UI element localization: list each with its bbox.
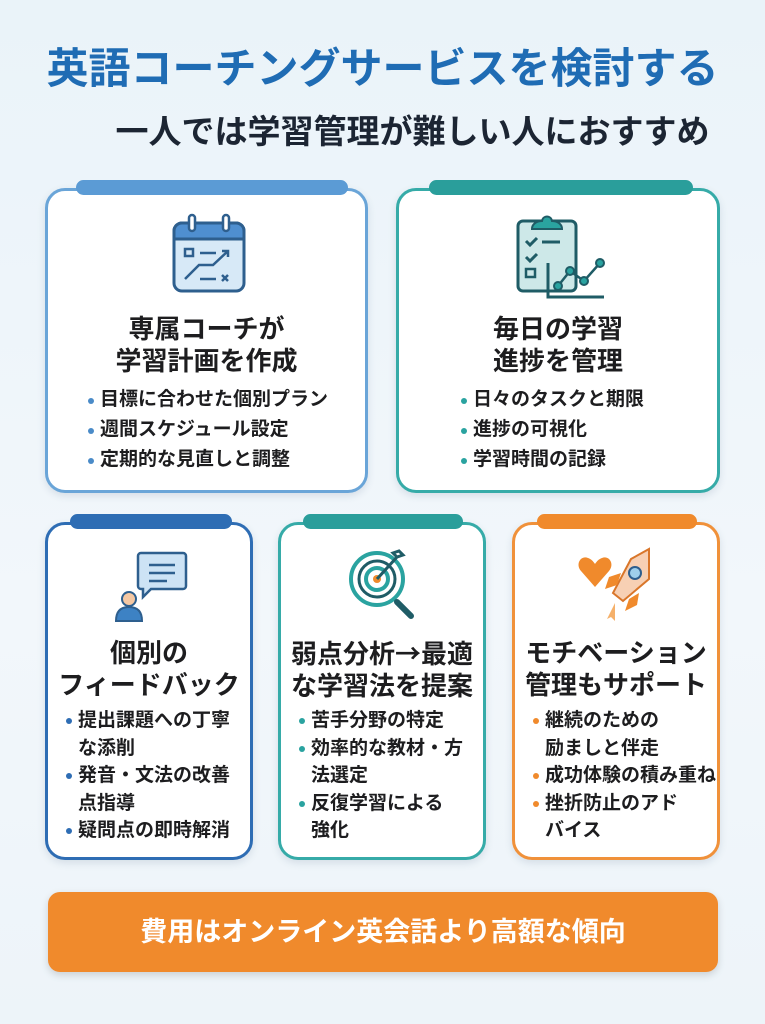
bullets: 定期的な見直しと調整 — [100, 449, 290, 470]
bullets — [461, 389, 644, 470]
bullets: 効率的な教材・方 — [311, 738, 463, 758]
heading: モチベーション — [525, 638, 707, 668]
panel: progress — [396, 188, 720, 493]
heading: 毎日の学習 — [493, 314, 623, 344]
bullets: 週間スケジュール設定 — [100, 419, 289, 440]
panel: feedback — [45, 522, 253, 860]
bar — [76, 180, 348, 195]
banner: cost note — [48, 892, 718, 972]
bullets: 進捗の可視化 — [473, 419, 587, 440]
bullets: 日々のタスクと期限 — [473, 389, 644, 410]
icon: target magnifier — [349, 549, 414, 619]
bullets: 目標に合わせた個別プラン — [100, 389, 328, 410]
heading — [493, 314, 623, 376]
heading — [58, 638, 240, 700]
heading — [291, 634, 473, 701]
icon: heart rocket — [578, 547, 650, 621]
bullets: 成功体験の積み重ね — [545, 765, 716, 786]
bar — [429, 180, 693, 195]
icon: clipboard chart — [516, 216, 605, 298]
bar — [537, 514, 697, 529]
bar — [70, 514, 232, 529]
heading: 学習計画を作成 — [115, 346, 298, 376]
icon: calendar — [172, 214, 246, 292]
heading: フィードバック — [58, 670, 240, 700]
heading: 弱点分析→最適 — [291, 634, 473, 671]
heading: 専属コーチが — [128, 314, 284, 344]
bullets: 強化 — [311, 820, 349, 841]
bar — [303, 514, 463, 529]
heading — [525, 638, 707, 700]
bullets: 法選定 — [311, 765, 368, 786]
title: 英語コーチングサービスを検討する — [46, 45, 718, 92]
bullets — [299, 710, 463, 841]
bullets: バイス — [545, 820, 601, 841]
bullets: 挫折防止のアド — [545, 792, 678, 814]
bullets: 苦手分野の特定 — [311, 710, 444, 731]
banner: cost note: 費用はオンライン英会話より高額な傾向 — [140, 917, 626, 947]
bullets: 継続のための — [545, 710, 659, 731]
bullets — [66, 710, 230, 841]
bullets: 疑問点の即時解消 — [78, 820, 230, 841]
heading — [115, 314, 298, 376]
bullets — [533, 710, 716, 841]
panel: coach plan — [45, 188, 368, 493]
bullets — [88, 388, 328, 470]
bullets: 学習時間の記録 — [473, 449, 606, 470]
bullets: 反復学習による — [311, 792, 443, 814]
heading: 進捗を管理 — [493, 346, 623, 376]
subtitle: 一人では学習管理が難しい人におすすめ — [116, 113, 710, 150]
bullets: 点指導 — [78, 792, 135, 814]
icon: person speech — [115, 552, 188, 622]
heading: 個別の — [110, 638, 188, 668]
heading: 管理もサポート — [525, 670, 707, 700]
panel: motivation — [512, 522, 720, 860]
heading: な学習法を提案 — [291, 671, 473, 701]
bullets: 励ましと伴走 — [545, 738, 659, 758]
bullets: な添削 — [78, 738, 135, 758]
bullets: 提出課題への丁寧 — [78, 710, 230, 731]
panel: weakness — [278, 522, 486, 860]
bullets: 発音・文法の改善 — [78, 765, 230, 786]
